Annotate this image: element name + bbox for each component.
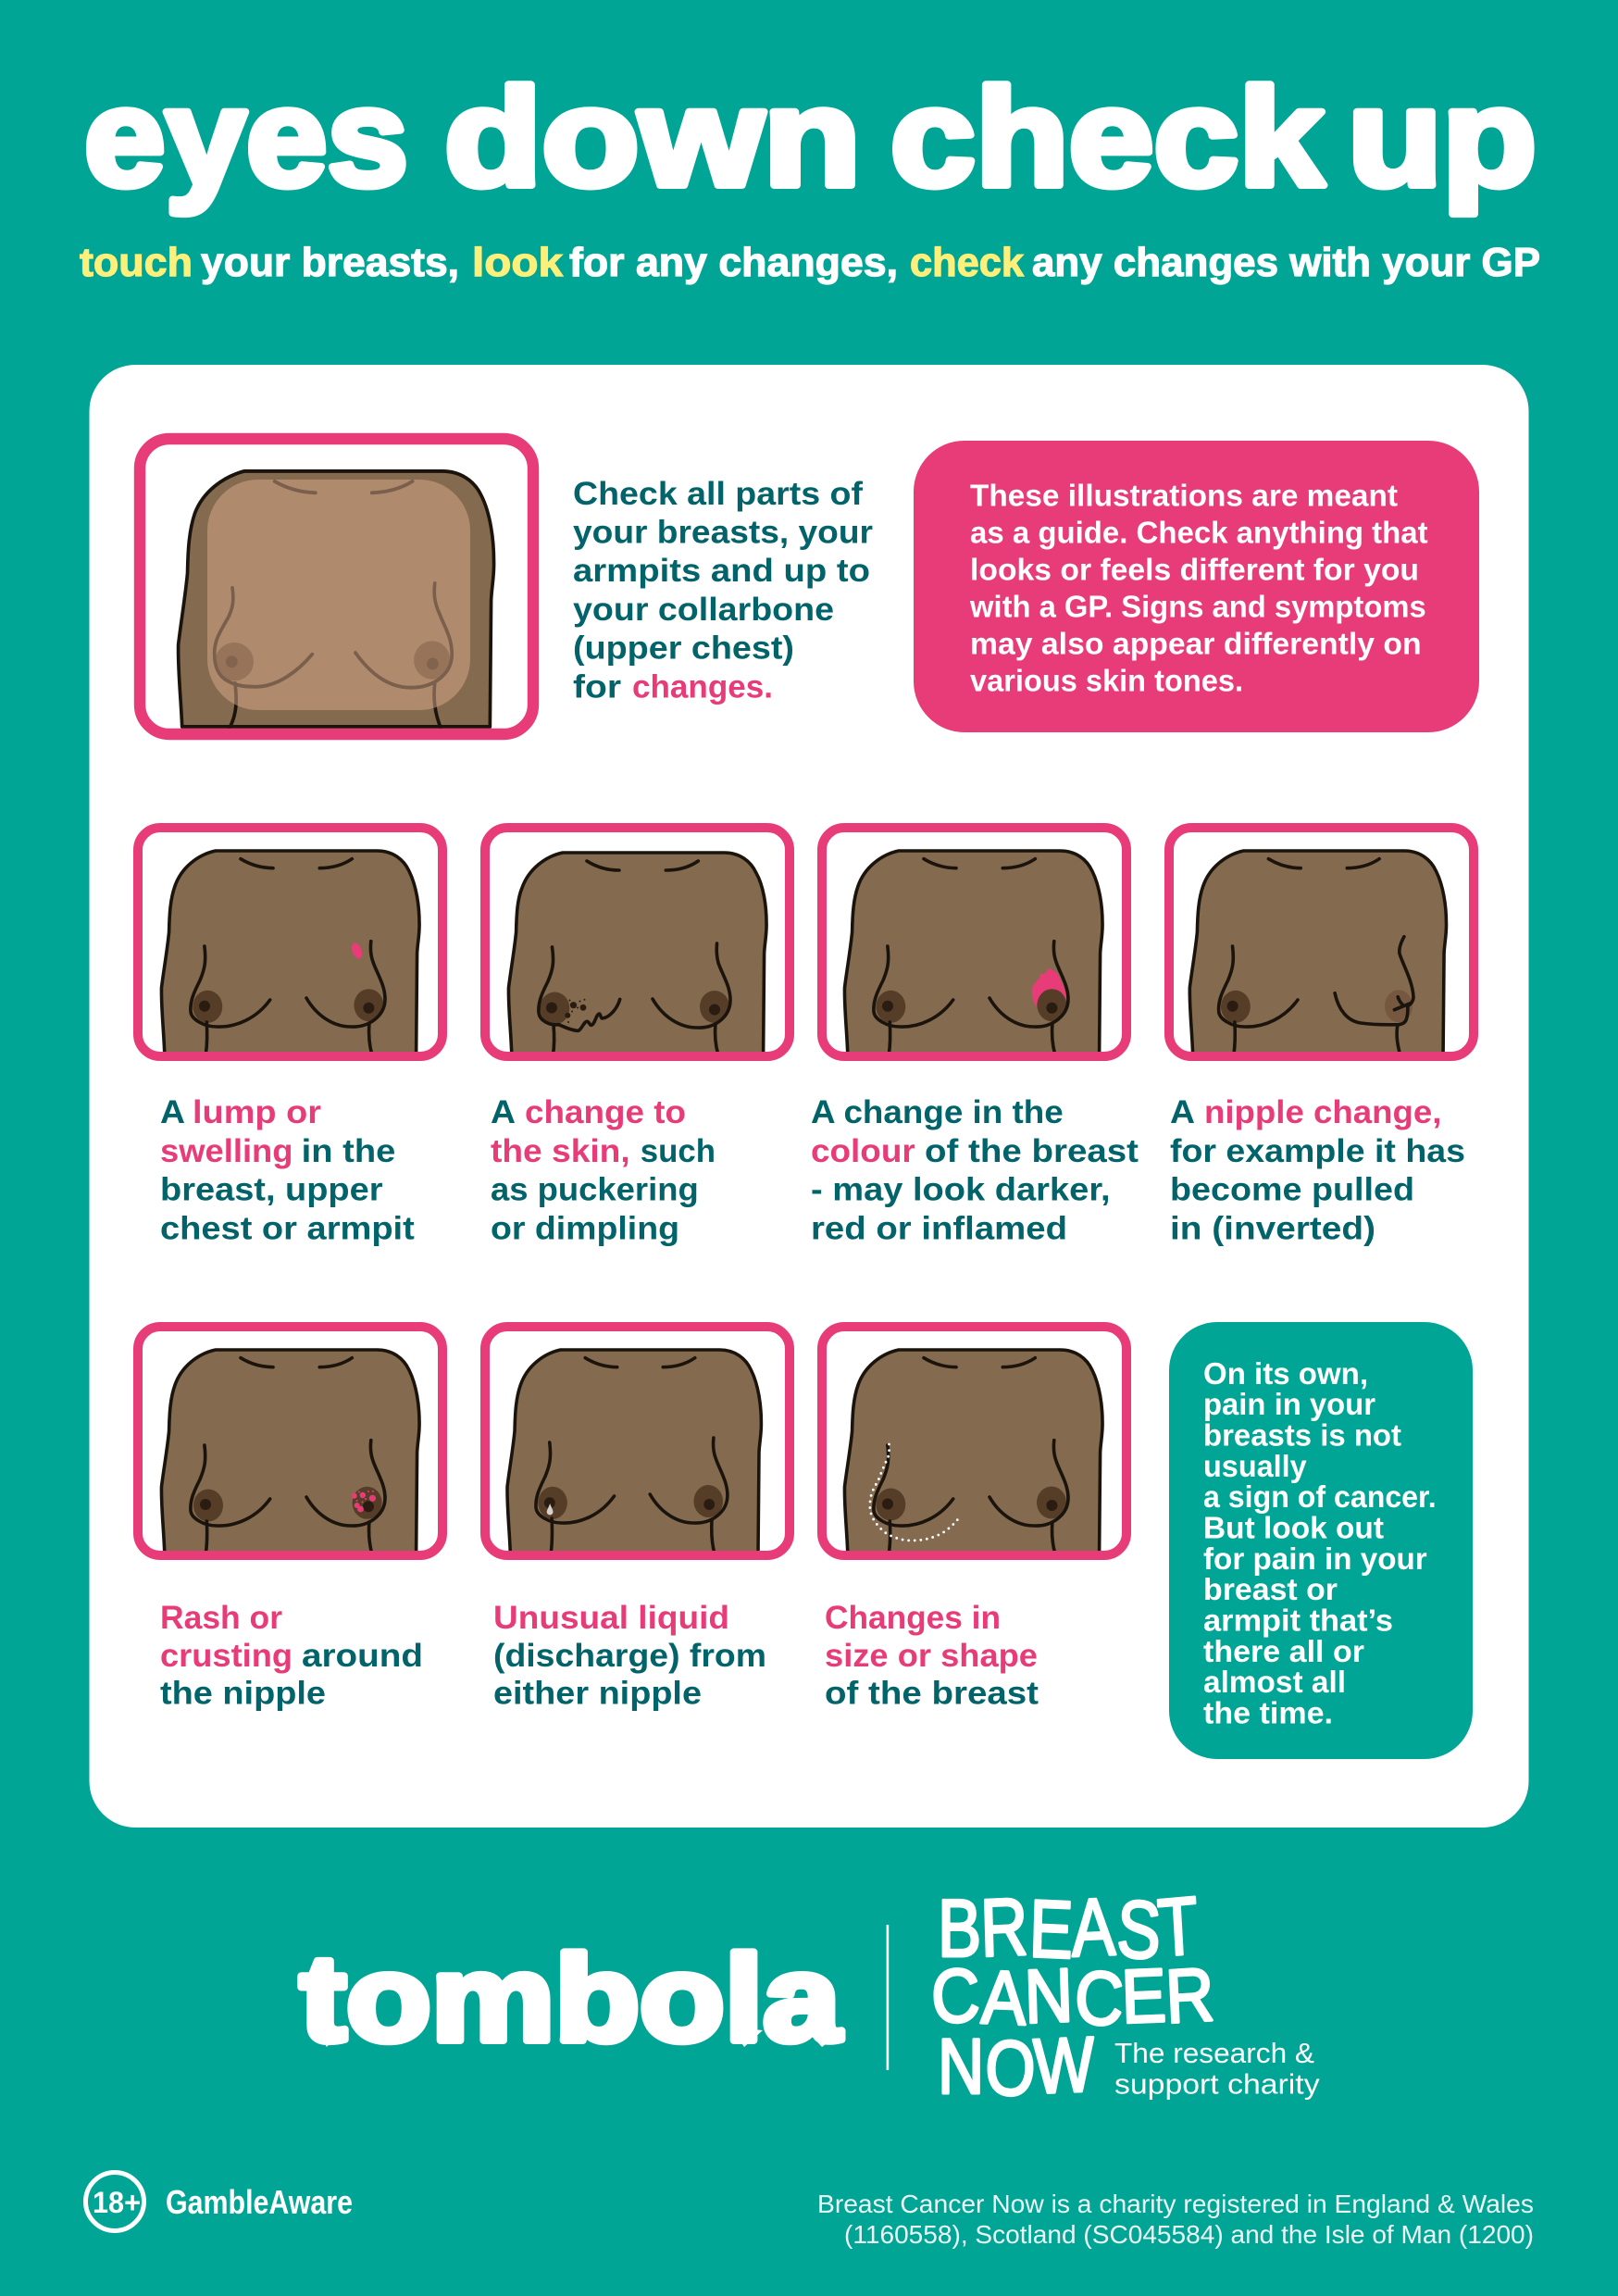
title: check [890, 59, 1325, 215]
illustration: lump or swelling [138, 828, 442, 1056]
caption: colour: red or inflamed [811, 1210, 1067, 1246]
caption: nipple: in (inverted) [1170, 1210, 1375, 1246]
callout: pain note: breast or [1203, 1572, 1338, 1606]
callout: pain note: pain in your [1203, 1387, 1375, 1421]
caption: skin: the skin, [491, 1133, 630, 1169]
caption: lump: A [160, 1094, 185, 1130]
charity registration note [817, 2190, 1534, 2249]
caption: skin: change to [525, 1094, 686, 1130]
callout: pain note: breasts is not [1203, 1418, 1401, 1453]
caption: nipple: for example it has [1170, 1133, 1465, 1169]
icon: 18+ [85, 2172, 144, 2231]
charity registration note: Breast Cancer Now is a charity registered in England & Wales [817, 2190, 1534, 2218]
caption: nipple [1170, 1094, 1465, 1246]
caption: discharge: (discharge) from [493, 1638, 766, 1674]
caption: discharge: Unusual liquid [493, 1600, 729, 1636]
illustration: size or shape change [822, 1327, 1126, 1555]
illustration: nipple discharge [485, 1327, 790, 1555]
caption: nipple: nipple change, [1204, 1094, 1441, 1130]
text: check all parts [573, 476, 873, 705]
text: check all parts: (upper chest) [573, 630, 794, 667]
logo: tombola: tombola [300, 1930, 842, 2066]
caption: nipple: become pulled [1170, 1172, 1414, 1208]
caption: skin [491, 1094, 716, 1246]
illustration: colour change [822, 828, 1126, 1056]
caption: skin: or dimpling [491, 1210, 679, 1246]
callout: pain note: armpit that’s [1203, 1603, 1393, 1638]
logo: Breast Cancer Now: NOW [938, 2021, 1096, 2113]
title [84, 59, 1537, 215]
subtitle: any changes with your GP [1032, 240, 1540, 285]
subtitle [80, 240, 1540, 285]
caption: rash [160, 1600, 423, 1712]
caption: skin: A [491, 1094, 516, 1130]
caption: size or shape: size or shape [825, 1638, 1038, 1674]
callout: pain note: almost all [1203, 1665, 1346, 1699]
GambleAware: GambleAware [166, 2183, 353, 2221]
callout: illustrations guide: with a GP. Signs and symptoms [969, 590, 1426, 624]
caption: lump: in the [302, 1133, 395, 1169]
caption: lump: breast, upper [160, 1172, 383, 1208]
caption: lump: chest or armpit [160, 1210, 415, 1246]
caption: skin: as puckering [491, 1172, 699, 1208]
caption: rash: Rash or [160, 1600, 282, 1636]
tagline: support charity [1114, 2068, 1320, 2101]
callout: illustrations guide: looks or feels different for you [970, 553, 1419, 587]
callout: illustrations guide: various skin tones. [970, 664, 1243, 698]
callout: illustrations guide: as a guide. Check anything that [970, 516, 1428, 550]
caption: lump [160, 1094, 415, 1246]
subtitle: touch [80, 240, 193, 285]
text: check all parts: your collarbone [573, 592, 834, 628]
caption: size or shape: Changes in [825, 1600, 1001, 1636]
caption: discharge [493, 1600, 766, 1712]
callout: pain note [1169, 1322, 1473, 1759]
logo: Breast Cancer Now [929, 1879, 1216, 2113]
charity registration note: (1160558), Scotland (SC045584) and the Isle of Man (1200) [844, 2220, 1534, 2249]
callout: pain note: usually [1203, 1449, 1307, 1483]
illustration: nipple change [1169, 828, 1474, 1056]
caption: lump: swelling [160, 1133, 292, 1169]
caption: skin: such [641, 1133, 716, 1169]
text: check all parts: changes. [632, 668, 773, 705]
caption: colour: - may look darker, [811, 1172, 1111, 1208]
caption: colour: A change in the [811, 1094, 1064, 1130]
callout: pain note: a sign of cancer. [1203, 1479, 1437, 1514]
title: down [444, 59, 861, 215]
icon: 18+: 18+ [93, 2186, 141, 2219]
caption: rash: the nipple [160, 1676, 326, 1712]
callout: illustrations guide: may also appear differently on [970, 627, 1422, 661]
caption: discharge: either nipple [493, 1676, 702, 1712]
subtitle: for any changes, [569, 240, 898, 285]
illustration: rash or crusting [138, 1327, 442, 1555]
callout: illustrations guide: These illustrations are meant [970, 479, 1398, 513]
tagline: The research & [1114, 2037, 1314, 2069]
title: up [1348, 59, 1537, 215]
text: check all parts: armpits and up to [573, 553, 870, 589]
caption: rash: around [302, 1638, 423, 1674]
tagline [1114, 2037, 1320, 2101]
subtitle: your breasts, [201, 240, 459, 285]
caption: size or shape: of the breast [825, 1676, 1039, 1712]
text: check all parts: for [573, 668, 621, 705]
subtitle: check [910, 240, 1025, 285]
caption: colour: of the breast [925, 1133, 1139, 1169]
callout: pain note: the time. [1203, 1696, 1333, 1730]
caption: nipple: A [1170, 1094, 1195, 1130]
logo: Breast Cancer Now: CANCER [929, 1953, 1216, 2042]
caption: colour [811, 1094, 1139, 1246]
callout: pain note: for pain in your [1203, 1541, 1427, 1576]
subtitle: look [472, 240, 564, 285]
text: check all parts: your breasts, your [573, 515, 873, 551]
panel: main white card [89, 365, 1529, 1828]
caption: rash: crusting [160, 1638, 292, 1674]
logo: Breast Cancer Now: BREAST [938, 1879, 1201, 1976]
callout: illustrations guide [914, 441, 1479, 732]
callout: pain note: But look out [1203, 1511, 1384, 1545]
caption: colour: colour [811, 1133, 915, 1169]
title: eyes [84, 59, 408, 215]
callout: pain note: On its own, [1203, 1356, 1368, 1391]
illustration: skin change [485, 828, 790, 1056]
caption: size or shape [825, 1600, 1039, 1712]
text: check all parts: Check all parts of [573, 476, 863, 512]
callout: pain note: there all or [1203, 1634, 1364, 1668]
illustration: all parts to check [140, 439, 533, 734]
caption: lump: lump or [193, 1094, 321, 1130]
